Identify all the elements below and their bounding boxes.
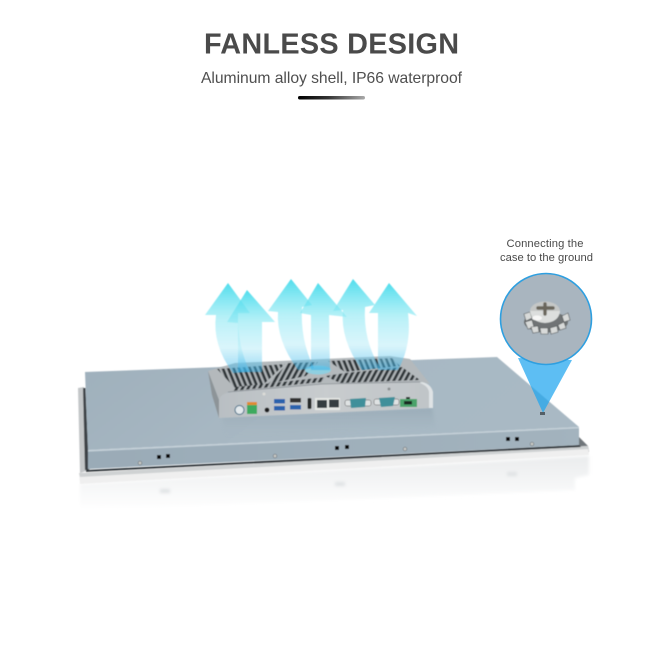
green power connector (400, 399, 417, 407)
arrow 3 (268, 279, 314, 370)
arrow 4 (300, 283, 347, 370)
bottom frame strip (79, 446, 589, 484)
panel reflection (80, 456, 589, 510)
arrow 5 (333, 279, 380, 370)
case screws (262, 392, 266, 396)
computer box reflection on plate (222, 408, 436, 437)
heatsink centre logo (305, 366, 331, 374)
title underline bar (298, 96, 365, 100)
fanless box computer (208, 356, 433, 418)
subtitle: Aluminum alloy shell, IP66 waterproof (201, 70, 463, 87)
power button (235, 406, 244, 414)
LAN ports (315, 398, 340, 410)
ground screw callout: case to the ground (500, 252, 593, 264)
HDMI (308, 398, 312, 409)
serial ports (345, 400, 371, 406)
front face (219, 382, 432, 418)
arrow 6 (369, 283, 417, 370)
rear plate side face (88, 427, 579, 469)
USB ports (274, 399, 285, 404)
magnifier circle (500, 274, 592, 364)
panel PC: display frame (78, 357, 589, 484)
magnified screw (524, 302, 570, 334)
heat airflow arrows (205, 279, 417, 373)
ground screw point (540, 412, 545, 415)
left side (208, 371, 219, 418)
callout cone (518, 358, 572, 413)
callout label: Connecting the (506, 238, 584, 250)
arrow 1 (205, 283, 250, 373)
arrow 2 (227, 290, 275, 372)
ground screw callout (500, 238, 593, 415)
heatsink top (208, 356, 430, 400)
rear plate top face (85, 357, 579, 450)
front bezel frame (78, 387, 90, 473)
side screws (138, 442, 534, 465)
fins right (328, 358, 400, 372)
green terminal (247, 405, 257, 414)
fins left (217, 364, 285, 389)
vents (157, 437, 519, 459)
title: FANLESS DESIGN (204, 28, 459, 60)
